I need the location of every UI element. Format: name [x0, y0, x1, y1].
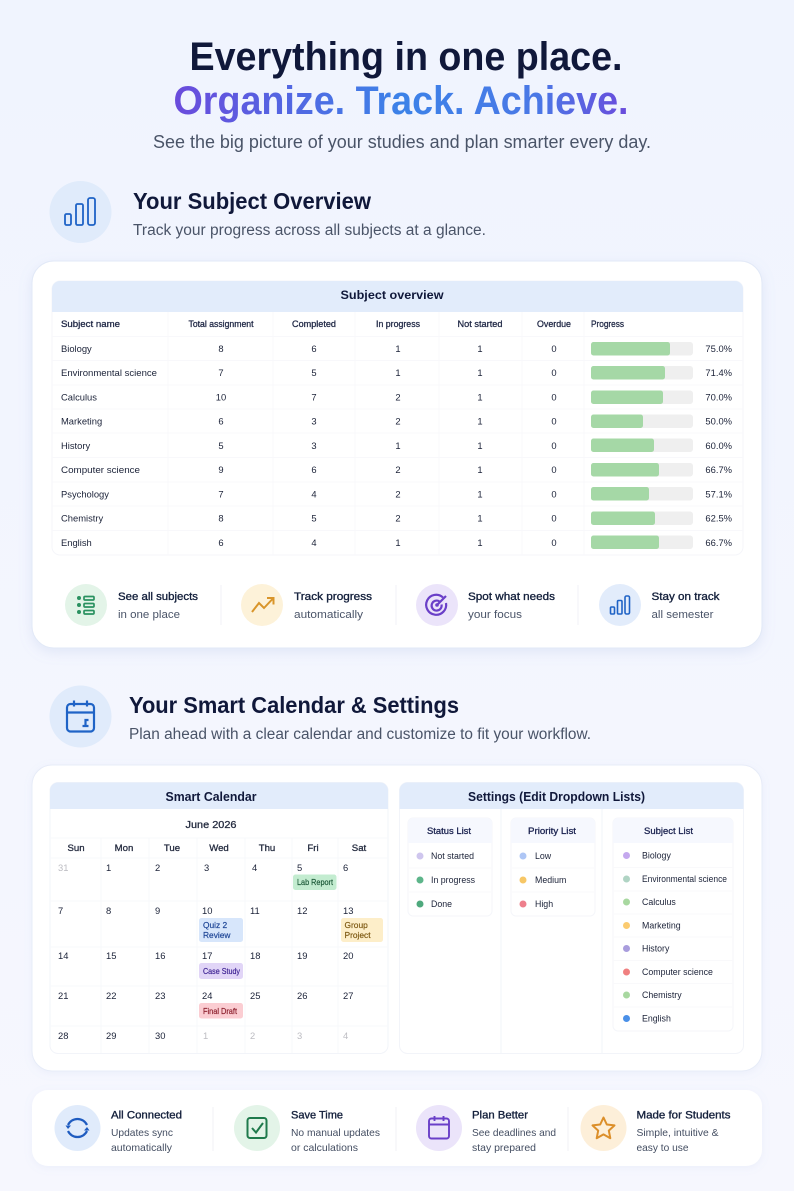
smart calendar: 8	[106, 905, 111, 916]
row: Computer science: 2	[395, 464, 401, 475]
row: Psychology: 1	[477, 488, 483, 500]
icon: calendar	[50, 686, 112, 748]
benefit: made for students: Simple, intuitive &	[636, 1128, 719, 1139]
event: Quiz 2 Review: Quiz 2	[203, 920, 228, 930]
row: English: English	[61, 537, 92, 548]
smart calendar: 23	[155, 990, 165, 1001]
row: Chemistry: 2	[395, 512, 401, 524]
smart calendar: 10	[202, 905, 212, 916]
row: Computer science: 0	[551, 464, 557, 475]
feature: see all subjects	[65, 584, 198, 626]
row: Chemistry: 62.5%	[705, 512, 732, 524]
benefit: all connected: automatically	[111, 1143, 173, 1154]
row: Environmental science: 71.4%	[705, 367, 732, 378]
benefit: save time: Save Time	[291, 1110, 343, 1122]
subject overview table: Completed	[292, 319, 336, 329]
row: Calculus: 2	[395, 392, 401, 402]
subject list	[613, 818, 733, 1031]
row: Biology	[61, 342, 732, 356]
panel: calendar and settings	[32, 765, 762, 1071]
event: Lab Report	[293, 874, 336, 890]
subject list: Computer science	[642, 967, 713, 977]
feature: stay on track: Stay on track	[652, 591, 720, 603]
row: Psychology: 57.1%	[705, 488, 732, 500]
smart calendar: 21	[58, 990, 68, 1001]
row: Psychology: 4	[311, 488, 317, 500]
subject overview table: Subject name	[61, 319, 120, 329]
event: Final Draft	[199, 1003, 243, 1018]
row: Marketing: 2	[395, 416, 401, 426]
benefit: plan better: stay prepared	[472, 1143, 536, 1154]
smart calendar: 13	[343, 905, 353, 916]
row: English: 6	[218, 537, 224, 548]
row: Environmental science: 7	[218, 367, 224, 378]
row: Biology: 6	[311, 343, 317, 354]
row: Computer science: 9	[218, 464, 224, 475]
subject list: Chemistry	[642, 990, 682, 1000]
priority list	[511, 818, 595, 916]
smart calendar: 25	[250, 990, 260, 1001]
priority list: High	[535, 899, 553, 909]
row: English	[61, 536, 732, 549]
feature: track progress	[241, 584, 372, 626]
event: Final Draft: Final Draft	[203, 1006, 238, 1016]
smart calendar: 27	[343, 990, 353, 1001]
subject overview table: Overdue	[537, 319, 571, 329]
title	[174, 35, 628, 123]
row: Psychology: Psychology	[61, 488, 109, 500]
row: Chemistry: 1	[477, 512, 483, 524]
row: Calculus: 70.0%	[705, 392, 732, 402]
priority list: Medium	[535, 875, 566, 885]
priority list: Priority List	[528, 826, 576, 837]
benefit: plan better	[416, 1105, 556, 1154]
row: Calculus: Calculus	[61, 392, 97, 402]
row: English: 1	[477, 537, 483, 548]
benefit: plan better: Plan Better	[472, 1110, 528, 1122]
row: Marketing: Marketing	[61, 416, 102, 426]
smart calendar: 18	[250, 950, 260, 961]
benefit: made for students: easy to use	[636, 1143, 689, 1154]
smart calendar: 2	[155, 862, 160, 873]
row: History: 1	[477, 440, 483, 451]
smart calendar: 2	[250, 1030, 255, 1041]
event: Case Study: Case Study	[203, 966, 241, 976]
subtitle: See the big picture of your studies and plan smarter every day.	[153, 132, 651, 152]
row: Calculus	[61, 390, 732, 404]
row: Calculus: 0	[551, 392, 557, 402]
subject list: Environmental science	[642, 874, 727, 884]
benefit: save time: No manual updates	[291, 1128, 380, 1139]
panel: subject overview	[32, 261, 762, 648]
row: Biology: Biology	[61, 343, 92, 354]
feature: spot what needs your focus	[416, 584, 555, 626]
row: Computer science: 6	[311, 464, 317, 475]
row: Psychology: 0	[551, 488, 557, 500]
smart calendar: 31	[58, 862, 68, 873]
row: Calculus: 7	[311, 392, 317, 402]
row: Computer science	[61, 463, 732, 476]
subject list: Calculus	[642, 897, 676, 907]
row: Computer science: 1	[477, 464, 483, 475]
smart calendar: 29	[106, 1030, 116, 1041]
status list: Status List	[427, 826, 471, 837]
feature: stay on track: all semester	[652, 609, 714, 621]
row: Marketing: 6	[218, 416, 224, 426]
event: Group Project: Project	[344, 930, 371, 940]
smart calendar: 22	[106, 990, 116, 1001]
smart calendar: 6	[343, 862, 348, 873]
row: Environmental science: 1	[395, 367, 401, 378]
smart calendar: Smart Calendar	[166, 789, 256, 804]
row: History: 60.0%	[705, 440, 732, 451]
row: Chemistry: Chemistry	[61, 512, 104, 524]
smart calendar: Fri	[307, 843, 319, 854]
status list	[408, 818, 492, 916]
smart calendar: 11	[250, 905, 260, 916]
subject list: Marketing	[642, 920, 681, 930]
row: History: 5	[218, 440, 224, 451]
row: Marketing: 3	[311, 416, 317, 426]
feature: stay on track	[599, 584, 720, 626]
smart calendar: Thu	[259, 843, 275, 854]
row: Marketing: 1	[477, 416, 483, 426]
smart calendar: Sun	[67, 843, 85, 854]
benefit: made for students: Made for Students	[636, 1110, 731, 1122]
row: Chemistry: 8	[218, 512, 224, 524]
row: English: 66.7%	[705, 537, 732, 548]
status list: Not started	[431, 851, 474, 861]
section description: Track your progress across all subjects at a glance.	[133, 222, 486, 239]
event: Quiz 2 Review	[199, 918, 243, 942]
row: Psychology: 7	[218, 488, 224, 500]
benefit: made for students	[580, 1105, 731, 1154]
row: Computer science: Computer science	[61, 464, 140, 475]
title: Organize. Track. Achieve.	[174, 79, 628, 123]
feature: see all subjects: in one place	[118, 609, 180, 621]
row: Environmental science: Environmental science	[61, 367, 157, 378]
feature: spot what needs your focus: Spot what needs	[468, 591, 555, 603]
subject list: Subject List	[644, 826, 693, 837]
event: Lab Report: Lab Report	[297, 877, 334, 887]
row: Chemistry: 5	[311, 512, 317, 524]
settings panel	[400, 782, 744, 1054]
smart calendar: 4	[343, 1030, 348, 1041]
title: Everything in one place.	[190, 35, 622, 79]
row: Environmental science: 0	[551, 367, 557, 378]
smart calendar: Wed	[209, 843, 229, 854]
subject overview table: In progress	[376, 319, 421, 329]
subject overview table	[52, 281, 743, 555]
row: English: 1	[395, 537, 401, 548]
subject overview table: Not started	[458, 319, 503, 329]
smart calendar: Mon	[115, 843, 133, 854]
section heading: Your Smart Calendar & Settings	[129, 692, 459, 718]
smart calendar: 19	[297, 950, 307, 961]
subject list: History	[642, 944, 670, 954]
smart calendar: 14	[58, 950, 68, 961]
smart calendar: June 2026	[186, 819, 237, 831]
row: Environmental science: 1	[477, 367, 483, 378]
benefit: all connected: All Connected	[111, 1110, 182, 1122]
event: Group Project	[341, 918, 383, 942]
smart calendar: 9	[155, 905, 160, 916]
row: Psychology	[61, 487, 732, 500]
smart calendar: 3	[204, 862, 209, 873]
section header: subject overview	[50, 181, 486, 243]
row: Chemistry: 0	[551, 512, 557, 524]
row: History: 1	[395, 440, 401, 451]
row: Marketing	[61, 414, 732, 428]
smart calendar: 28	[58, 1030, 68, 1041]
row: History: 0	[551, 440, 557, 451]
smart calendar: Sat	[352, 843, 367, 854]
smart calendar: 16	[155, 950, 165, 961]
row: Biology: 0	[551, 343, 557, 354]
event: Case Study	[199, 963, 243, 979]
row: Calculus: 1	[477, 392, 483, 402]
status list: Done	[431, 899, 452, 909]
section description: Plan ahead with a clear calendar and customize to fit your workflow.	[129, 726, 591, 743]
subject overview table: Subject overview	[340, 288, 444, 302]
row: Biology: 75.0%	[705, 343, 732, 354]
row: Marketing: 0	[551, 416, 557, 426]
smart calendar: 24	[202, 990, 212, 1001]
smart calendar: 30	[155, 1030, 165, 1041]
priority list: Low	[535, 851, 552, 861]
row: Psychology: 2	[395, 488, 401, 500]
feature: track progress: Track progress	[294, 591, 372, 603]
subject overview table: Total assignment	[188, 319, 254, 329]
subject overview table: Progress	[591, 319, 625, 329]
row: Biology: 1	[477, 343, 483, 354]
smart calendar: 5	[297, 862, 302, 873]
row: History: History	[61, 440, 90, 451]
benefit: all connected	[54, 1105, 182, 1154]
smart calendar	[50, 782, 388, 1054]
row: Computer science: 66.7%	[705, 464, 732, 475]
status list: In progress	[431, 875, 476, 885]
section heading: Your Subject Overview	[133, 188, 371, 214]
feature: spot what needs your focus: your focus	[468, 609, 523, 621]
smart calendar: 7	[58, 905, 63, 916]
row: History: 3	[311, 440, 317, 451]
smart calendar: 20	[343, 950, 353, 961]
row: Biology: 8	[218, 343, 224, 354]
feature: see all subjects: See all subjects	[118, 591, 198, 603]
row: Chemistry	[61, 512, 732, 525]
benefit: plan better: See deadlines and	[472, 1128, 556, 1139]
benefit: save time: or calculations	[291, 1143, 358, 1154]
smart calendar: 1	[106, 862, 111, 873]
subject list: English	[642, 1014, 671, 1024]
smart calendar: 17	[202, 950, 212, 961]
row: Environmental science: 5	[311, 367, 317, 378]
benefit: save time	[234, 1105, 380, 1154]
feature: track progress: automatically	[294, 609, 364, 621]
row: Environmental science	[61, 366, 732, 380]
event: Group Project: Group	[344, 920, 368, 930]
row: History	[61, 438, 732, 452]
smart calendar: Tue	[164, 843, 180, 854]
row: Biology: 1	[395, 343, 401, 354]
row: English: 4	[311, 537, 317, 548]
smart calendar: 15	[106, 950, 116, 961]
panel: benefits strip	[32, 1090, 762, 1166]
smart calendar: 3	[297, 1030, 302, 1041]
row: Calculus: 10	[216, 392, 226, 402]
smart calendar: 1	[203, 1030, 208, 1041]
benefit: all connected: Updates sync	[111, 1128, 173, 1139]
row: English: 0	[551, 537, 557, 548]
subject list: Biology	[642, 850, 671, 860]
smart calendar: 26	[297, 990, 307, 1001]
settings panel: Settings (Edit Dropdown Lists)	[468, 789, 645, 804]
icon: bar chart	[50, 181, 112, 243]
section header: calendar and settings	[50, 686, 591, 748]
smart calendar: 4	[252, 862, 257, 873]
row: Marketing: 50.0%	[705, 416, 732, 426]
event: Quiz 2 Review: Review	[203, 930, 231, 940]
smart calendar: 12	[297, 905, 307, 916]
